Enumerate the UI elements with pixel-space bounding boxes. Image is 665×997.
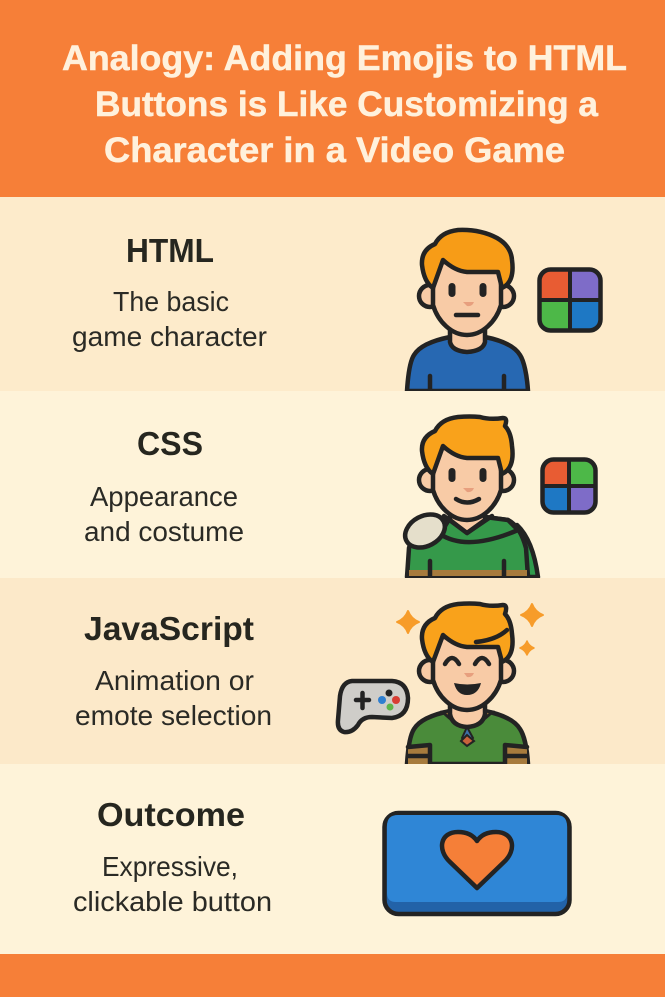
icon: game controller (338, 681, 408, 732)
panel: footer (0, 954, 665, 997)
icon: colour swatch grid (539, 269, 601, 331)
heading: JavaScript: JavaScript (84, 610, 254, 647)
icon: sparkles (397, 604, 543, 655)
panel: HTML (0, 197, 665, 391)
text: the basic game character (72, 286, 267, 352)
icon: basic character (407, 230, 528, 391)
text: expressive clickable button (73, 851, 272, 917)
heading: CSS: CSS (137, 425, 203, 462)
text: the basic game character: The basic (113, 286, 229, 317)
icon: button with heart (384, 813, 570, 914)
title (62, 39, 627, 170)
text: the basic game character: game character (72, 321, 267, 352)
text: appearance and costume: and costume (84, 516, 244, 547)
text: appearance and costume: Appearance (90, 481, 238, 512)
heading: HTML: HTML (126, 232, 214, 269)
text: animation or emote selection: Animation or (95, 665, 254, 696)
text: expressive clickable button: Expressive, (102, 851, 238, 882)
panel: CSS (85, 391, 598, 578)
icon: happy character (407, 604, 528, 764)
text: appearance and costume (84, 481, 244, 547)
panel: JavaScript (0, 578, 665, 764)
panel: header (0, 0, 665, 197)
heading: Outcome: Outcome (97, 796, 245, 833)
icon: costumed character (399, 416, 538, 577)
title: Analogy: Adding Emojis to HTML (62, 39, 627, 78)
text: expressive clickable button: clickable button (73, 886, 272, 917)
text: animation or emote selection (75, 665, 272, 731)
title: Character in a Video Game (104, 131, 565, 170)
panel: Outcome (0, 764, 665, 954)
text: animation or emote selection: emote selection (75, 700, 272, 731)
icon: colour swatch grid 2 (542, 459, 596, 513)
title: Buttons is Like Customizing a (95, 85, 599, 124)
